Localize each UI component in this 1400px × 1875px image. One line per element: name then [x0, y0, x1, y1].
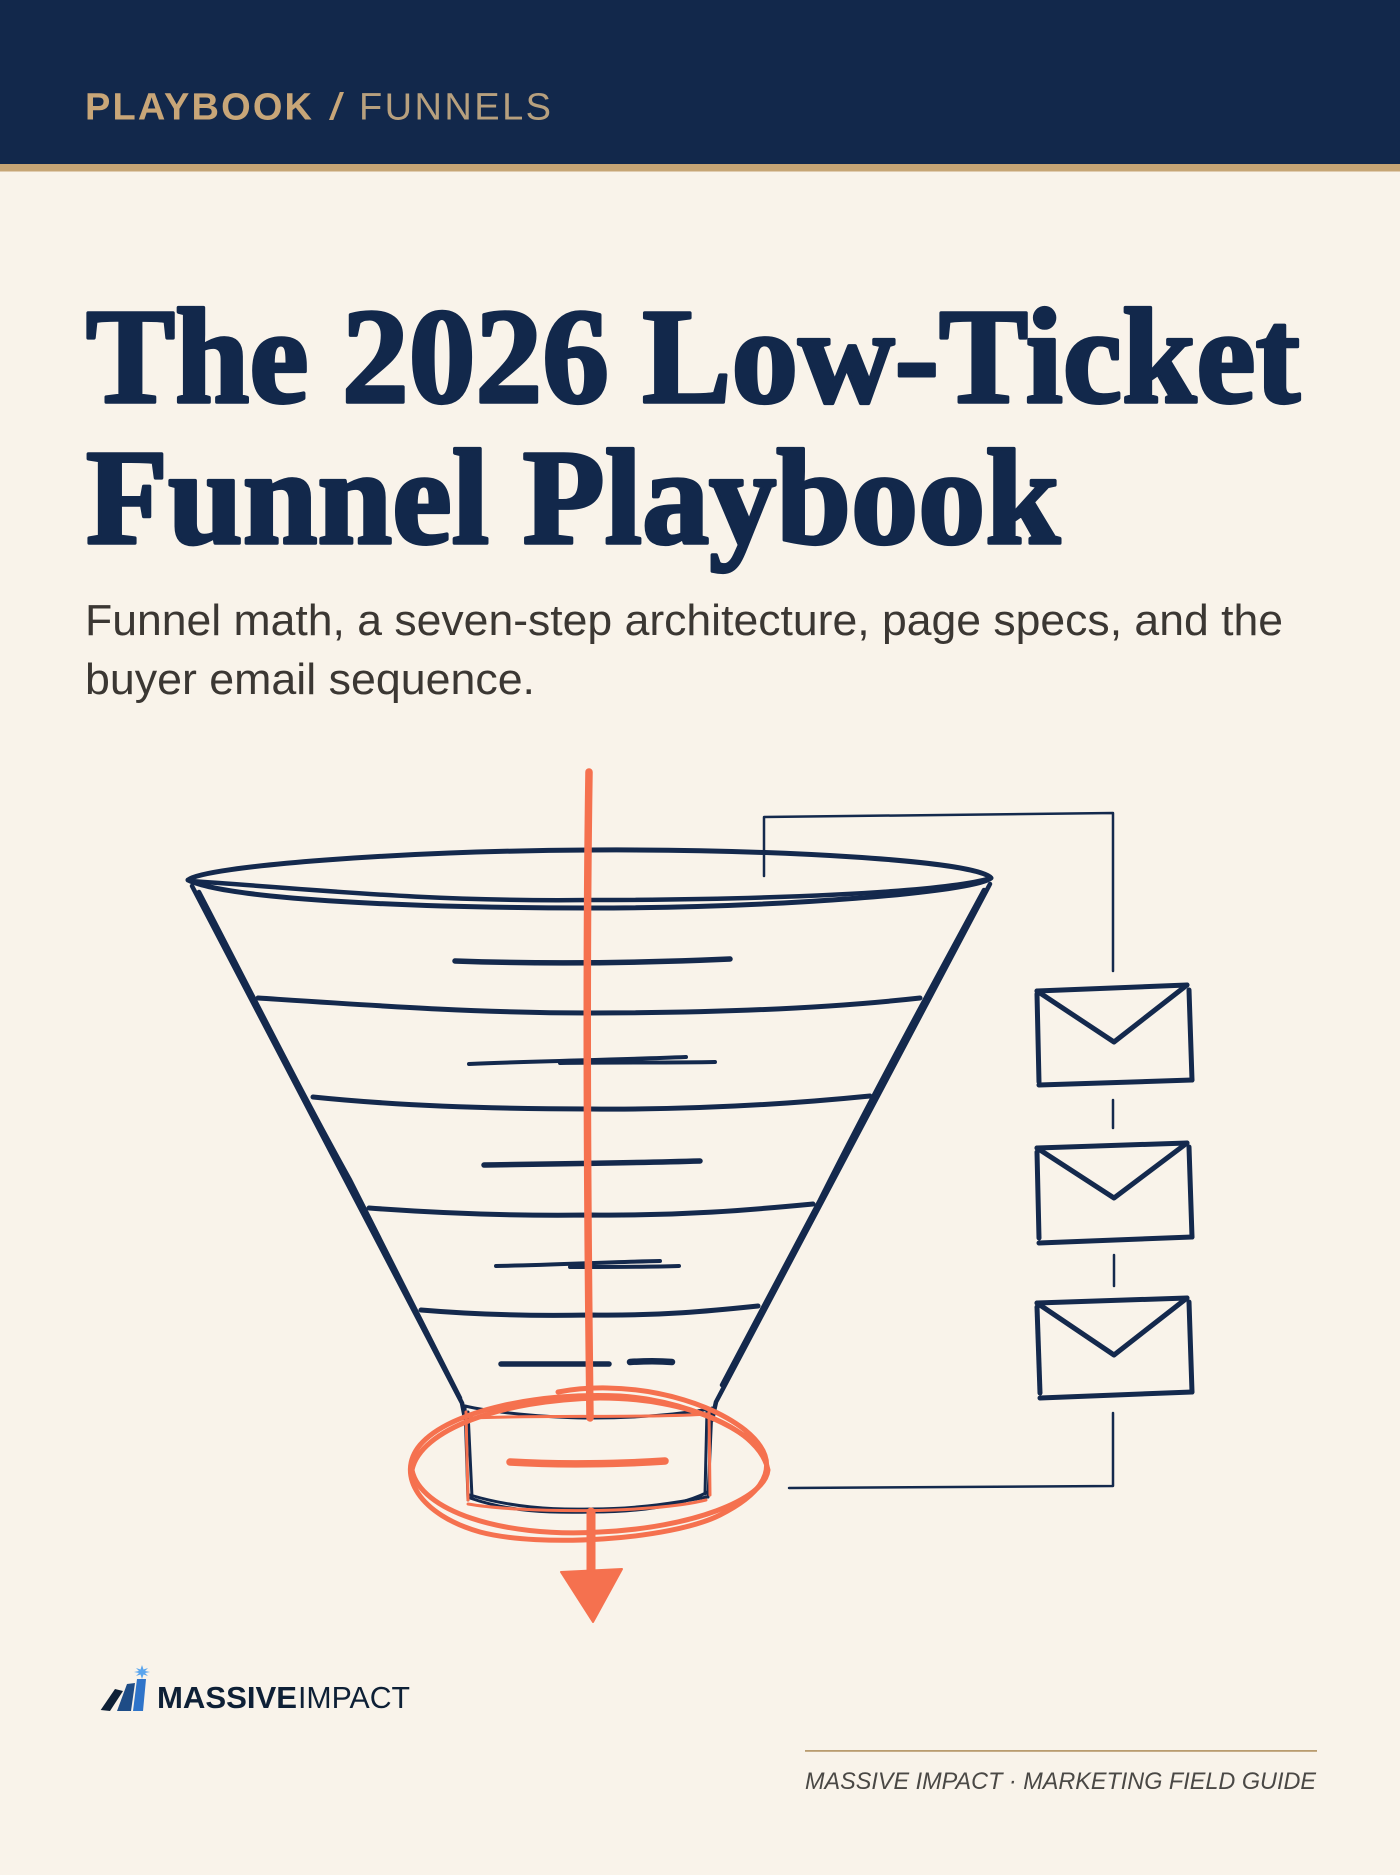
email icon 1: [1037, 985, 1192, 1085]
funnel spout box: [465, 1406, 712, 1512]
funnel rim: [188, 850, 991, 908]
subtitle: Funnel math, a seven-step architecture, page specs, and the: [85, 596, 1283, 645]
orange flow arrow: [561, 772, 622, 1622]
logo mark: [101, 1665, 150, 1711]
orange conversion line: [510, 1461, 665, 1464]
header label: [85, 86, 551, 128]
subtitle: buyer email sequence.: [85, 655, 535, 704]
header label: FUNNELS: [359, 86, 551, 128]
footer rule: [805, 1750, 1317, 1752]
email icon 2: [1037, 1143, 1192, 1243]
logo wordmark: MASSIVE: [157, 1680, 297, 1715]
title: [86, 282, 1300, 573]
logo wordmark: [157, 1680, 410, 1715]
brand logo: [101, 1665, 410, 1715]
funnel tier lines: [258, 998, 920, 1315]
connector: funnel to emails: [764, 813, 1113, 971]
connector: emails back to funnel: [789, 1413, 1113, 1488]
email icon 3: [1037, 1298, 1192, 1398]
title: Funnel Playbook: [86, 423, 1060, 573]
orange highlight ellipse: [410, 1388, 768, 1540]
funnel short text lines: [455, 959, 730, 1364]
logo wordmark: IMPACT: [298, 1680, 410, 1715]
funnel illustration: [188, 772, 1192, 1622]
title: The 2026 Low-Ticket: [86, 282, 1300, 432]
footer caption: MASSIVE IMPACT · MARKETING FIELD GUIDE: [805, 1768, 1317, 1795]
subtitle: [85, 596, 1283, 704]
header label: PLAYBOOK: [85, 86, 313, 128]
header label: /: [329, 86, 345, 128]
connector dash 2: [1113, 1255, 1115, 1286]
header band: [0, 0, 1400, 172]
connector dash 1: [1112, 1100, 1114, 1128]
funnel sides: [192, 884, 990, 1420]
